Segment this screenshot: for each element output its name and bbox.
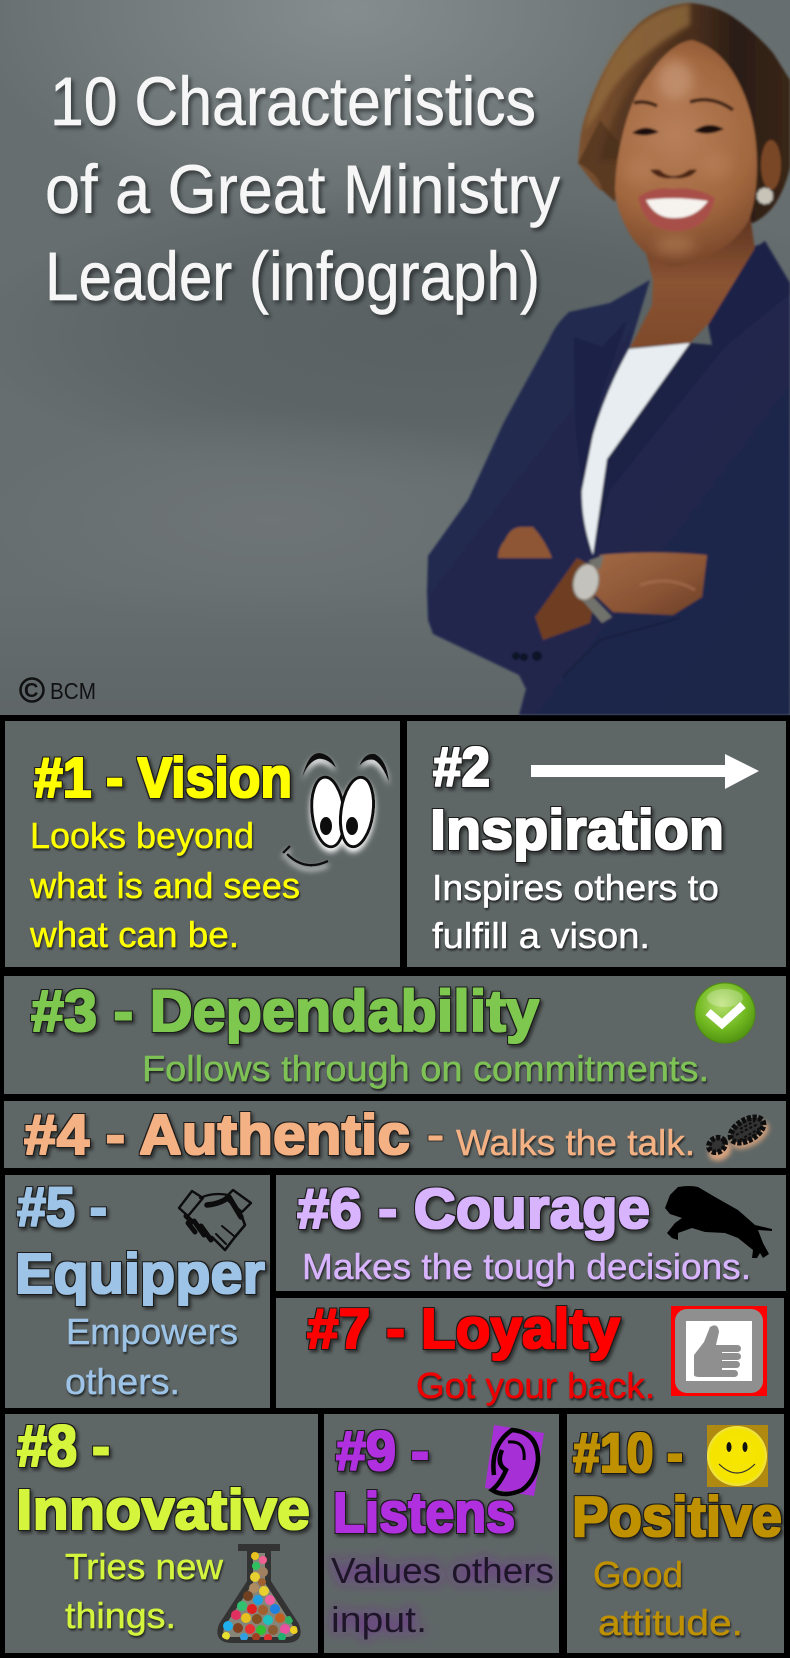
- description: Walks the talk.: [456, 1122, 695, 1163]
- cuff buttons: [512, 652, 520, 660]
- watch: [582, 555, 612, 623]
- panel: #4 Authentic: [4, 1101, 786, 1168]
- description: things.: [65, 1595, 176, 1636]
- description: what can be.: [29, 914, 239, 955]
- panel: #1 Vision: [5, 721, 400, 967]
- description: fulfill a vison.: [432, 915, 650, 956]
- nose: [650, 169, 697, 178]
- description: [331, 1550, 554, 1640]
- jacket: [427, 243, 790, 715]
- description: Follows through on commitments.: [142, 1048, 709, 1089]
- earring: [756, 188, 774, 204]
- description: Empowers: [66, 1311, 238, 1352]
- number: #2: [433, 735, 490, 798]
- icon: shoe print: [705, 1112, 774, 1165]
- title: [45, 63, 560, 315]
- face: [615, 40, 757, 267]
- icon: flask of coloured dots: [220, 1544, 298, 1642]
- hand: [498, 527, 552, 558]
- description: others.: [65, 1361, 180, 1402]
- heading: Listens: [333, 1481, 515, 1545]
- shirt: [582, 343, 690, 555]
- description: Tries new: [65, 1546, 224, 1587]
- icon: lion silhouette: [665, 1186, 772, 1258]
- panel: #7 Loyalty: [276, 1297, 784, 1408]
- description: input.: [331, 1599, 427, 1640]
- description: [65, 1546, 224, 1636]
- icon: thumbs up: [671, 1306, 767, 1396]
- heading: #1 - Vision: [34, 746, 292, 810]
- description: [432, 867, 719, 956]
- heading: #4 - Authentic: [24, 1103, 410, 1167]
- neck: [630, 215, 755, 348]
- copyright mark: [20, 678, 96, 704]
- panel: #5 Equipper: [5, 1175, 270, 1408]
- arrow: [531, 754, 759, 789]
- description: Inspires others to: [432, 867, 719, 908]
- mouth: [638, 188, 715, 231]
- heading: #3 - Dependability: [31, 979, 539, 1044]
- title: Leader (infograph): [45, 238, 540, 315]
- description: Looks beyond: [30, 815, 254, 856]
- panel: hero banner: [0, 0, 790, 715]
- description: [593, 1554, 743, 1643]
- description: Good: [593, 1554, 683, 1595]
- icon: cartoon eyes: [283, 753, 389, 865]
- description: what is and sees: [29, 865, 300, 906]
- title: 10 Characteristics: [50, 63, 536, 140]
- photo: smiling woman in navy blazer: [427, 3, 790, 715]
- description: Makes the tough decisions.: [302, 1246, 751, 1287]
- sleeve line: [563, 618, 680, 677]
- number: #5 -: [17, 1175, 107, 1238]
- heading: Innovative: [16, 1478, 310, 1542]
- description: [65, 1311, 238, 1402]
- dash: [428, 1135, 443, 1141]
- title: of a Great Ministry: [45, 151, 560, 228]
- wrist: [535, 558, 600, 640]
- panel: #9 Listens: [324, 1414, 559, 1653]
- description: [29, 815, 300, 955]
- description: Got your back.: [416, 1365, 655, 1406]
- forearm: [590, 552, 707, 615]
- panel: #8 Innovative: [5, 1414, 318, 1653]
- heading: #6 - Courage: [297, 1177, 650, 1241]
- heading: Inspiration: [430, 798, 724, 862]
- number: #8 -: [17, 1414, 110, 1479]
- icon: green check: [695, 983, 755, 1043]
- panel: #6 Courage: [276, 1175, 786, 1291]
- heading: Positive: [572, 1485, 782, 1549]
- description: attitude.: [598, 1602, 743, 1643]
- panel: #10 Positive: [567, 1414, 784, 1653]
- eyes: [632, 125, 724, 135]
- number: #9 -: [336, 1419, 429, 1482]
- panel: #3 Dependability: [4, 976, 786, 1094]
- eyebrows: [634, 100, 733, 110]
- heading: Equipper: [15, 1242, 265, 1306]
- ear: [761, 140, 781, 190]
- heading: #7 - Loyalty: [307, 1297, 620, 1361]
- number: #10 -: [573, 1421, 683, 1484]
- icon: smiley face: [707, 1425, 768, 1487]
- panel: #2 Inspiration: [407, 721, 786, 967]
- copyright mark: BCM: [50, 678, 96, 704]
- copyright mark: C: [24, 680, 38, 702]
- icon: ear: [485, 1425, 544, 1496]
- right lapel and collar: [708, 241, 790, 347]
- icon: handshake: [179, 1190, 251, 1250]
- description: Values others: [331, 1550, 554, 1591]
